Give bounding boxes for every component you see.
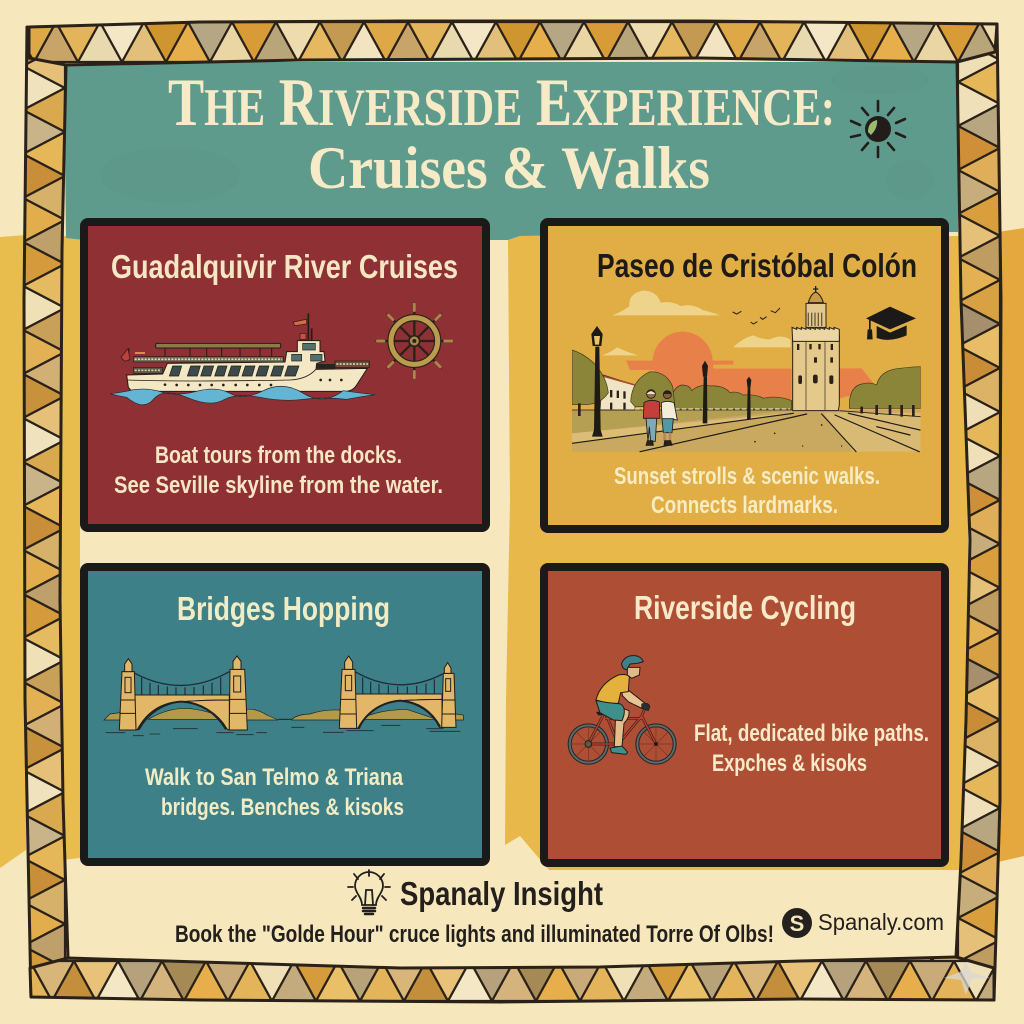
text: cycling description: Expches & kisoks <box>712 750 867 777</box>
text: river cruises description: Boat tours from the docks. <box>155 442 402 469</box>
icon: ship wheel <box>377 303 453 379</box>
heading: cycling: Riverside Cycling <box>634 589 856 626</box>
text: website: Spanaly.com <box>818 909 944 935</box>
yellow wash: left outer margin <box>0 235 26 868</box>
panel: paseo de cristobal colon <box>544 222 945 529</box>
text: insight tip: Book the "Golde Hour" cruce lights and illuminated Torre Of Olbs! <box>175 921 774 948</box>
text: cycling description: Flat, dedicated bike paths. <box>694 720 929 747</box>
text: bridges description: Walk to San Telmo & Triana <box>145 764 404 791</box>
heading: insight: Spanaly Insight <box>400 875 603 912</box>
text: paseo description <box>614 463 880 519</box>
panel: river cruises <box>84 222 486 528</box>
panel: bridges hopping <box>84 567 486 862</box>
birds <box>733 308 780 324</box>
panel: riverside cycling <box>544 567 945 863</box>
border: corner sparkle <box>944 962 990 995</box>
header mottling <box>100 66 934 203</box>
heading: paseo: Paseo de Cristóbal Colón <box>597 247 917 284</box>
lamp posts <box>591 326 751 437</box>
title line two: Cruises & Walks <box>308 135 710 201</box>
title <box>168 64 835 201</box>
title line one: THE RIVERSIDE EXPERIENCE: <box>168 64 835 140</box>
footer insight <box>175 870 944 948</box>
tower <box>793 335 839 411</box>
left bridge <box>119 656 247 730</box>
border: left side <box>24 27 68 997</box>
text: bridges description: bridges. Benches & kisoks <box>161 794 404 821</box>
yellow wash: right outer margin <box>998 228 1024 862</box>
yellow wash: right half behind cards <box>505 236 968 870</box>
walking couple <box>643 390 677 445</box>
icon: spanaly logo: S <box>790 911 804 936</box>
yellow wash: left inner strip <box>60 236 80 860</box>
header band <box>64 62 958 240</box>
icon: sun <box>851 101 905 157</box>
icon: light bulb <box>348 870 390 914</box>
heading: bridges: Bridges Hopping <box>177 590 390 627</box>
text: river cruises description <box>114 442 443 499</box>
heading: river cruises: Guadalquivir River Cruises <box>111 248 458 285</box>
icon: graduation cap <box>866 307 916 340</box>
icon: spanaly logo <box>782 908 812 938</box>
illustration: cyclist <box>570 656 675 763</box>
text: cycling description <box>694 720 929 777</box>
illustration: torre del oro promenade <box>572 286 921 452</box>
right bridge <box>339 656 456 728</box>
illustration: cruise boat <box>110 313 375 405</box>
text: bridges description <box>145 764 404 821</box>
text: paseo description: Sunset strolls & scenic walks. <box>614 463 880 490</box>
text: river cruises description: See Seville skyline from the water. <box>114 472 443 499</box>
border: right side <box>956 24 1001 1000</box>
text: paseo description: Connects lardmarks. <box>651 492 838 519</box>
illustration: two bridges <box>104 656 463 736</box>
border: top side <box>29 21 997 65</box>
border: bottom side <box>30 957 994 1002</box>
